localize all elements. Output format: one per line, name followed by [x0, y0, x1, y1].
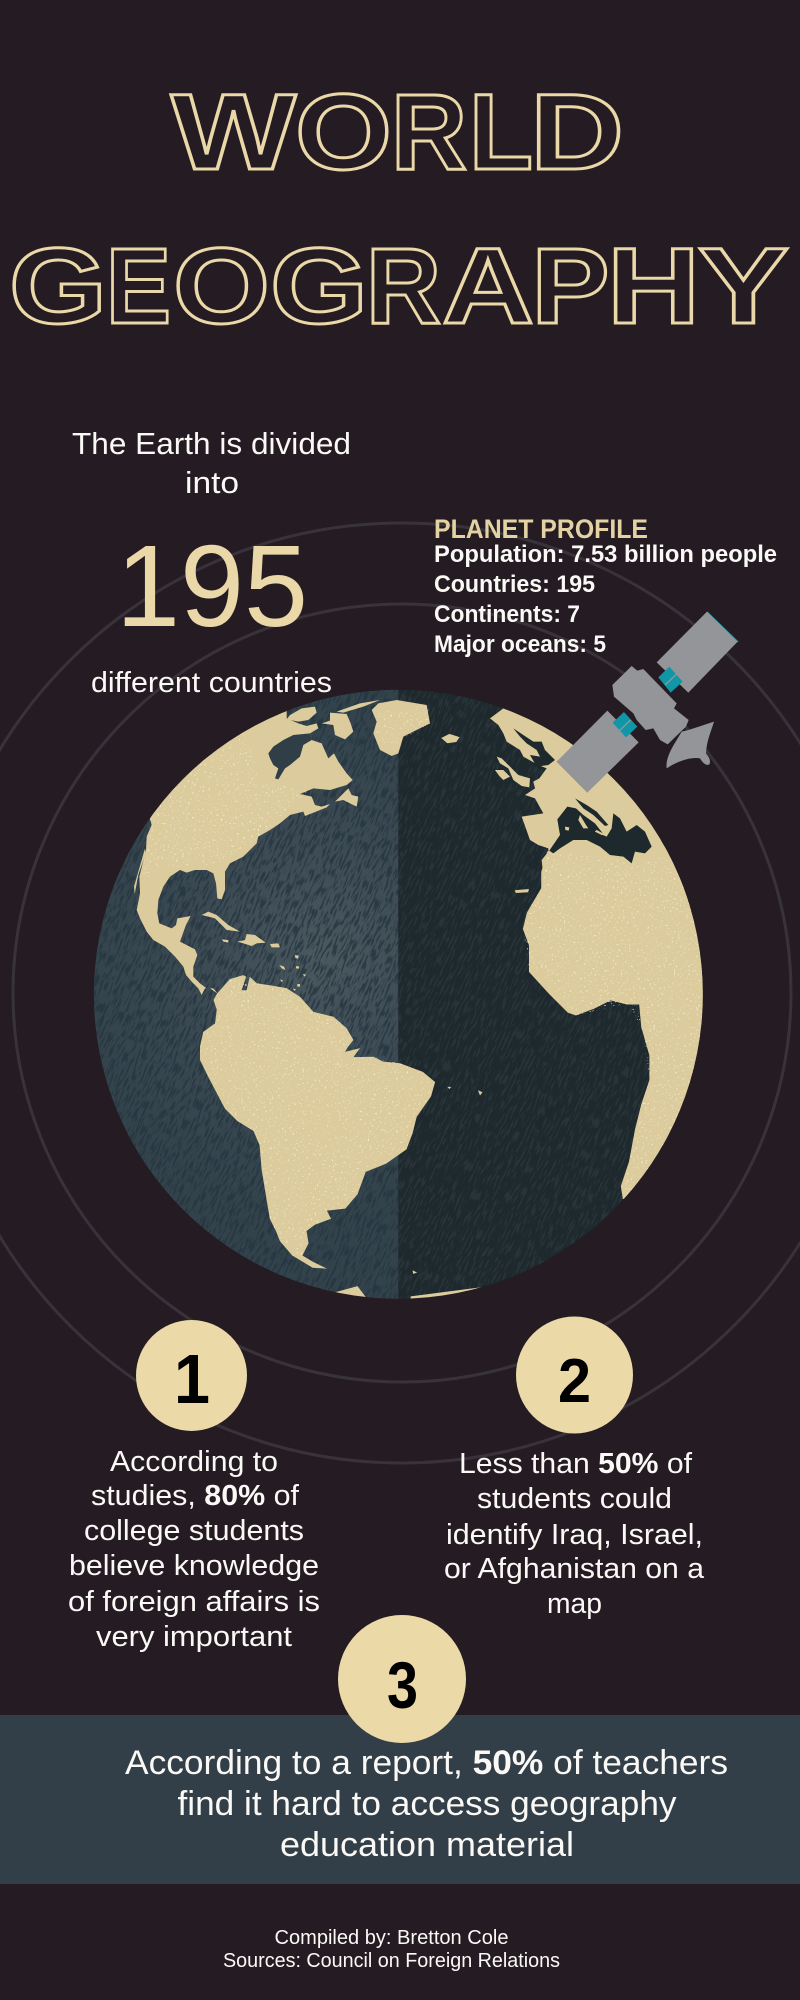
- connector gaps: [619, 674, 677, 731]
- Europe: [490, 708, 688, 900]
- Africa: [522, 846, 703, 1200]
- fact 2 text: map: [547, 1588, 602, 1620]
- fact 1 text: of foreign affairs is: [68, 1586, 320, 1618]
- population: Population: 7.53 billion people: [434, 541, 777, 568]
- big number 195: 195: [116, 521, 308, 651]
- number 2: 2: [558, 1347, 591, 1416]
- globe: [94, 690, 703, 1299]
- satellite dish: [666, 722, 714, 768]
- title line: GEOGRAPHY: H: [607, 225, 700, 346]
- fact 3 text: education material: [280, 1826, 574, 1864]
- title line: GEOGRAPHY: P: [532, 225, 610, 346]
- badge 1: [136, 1320, 247, 1431]
- South America: [200, 975, 435, 1269]
- orbit rings: [0, 523, 800, 1463]
- fact 2 text: students could: [477, 1483, 672, 1515]
- Baja California: [134, 848, 146, 894]
- title line: WORLD: O: [295, 71, 392, 192]
- ocean texture right: [398, 690, 650, 1298]
- badge 3: [338, 1615, 466, 1743]
- ocean right half: [398, 690, 650, 1298]
- fact 1 text: college students: [84, 1515, 304, 1547]
- Iceland: [441, 734, 460, 743]
- ocean texture left: [94, 690, 398, 1298]
- title line: WORLD: R: [391, 71, 467, 192]
- panel: fact 3 band: [0, 1615, 800, 1884]
- fact 1 text: studies, 80% of: [91, 1480, 300, 1512]
- sources: Sources: Council on Foreign Relations: [223, 1950, 560, 1972]
- title line: GEOGRAPHY: G: [9, 225, 107, 346]
- title line: GEOGRAPHY: G: [270, 225, 368, 346]
- fact 1 text: According to: [110, 1446, 278, 1478]
- Greenland: [372, 700, 430, 756]
- major oceans: Major oceans: 5: [434, 631, 606, 658]
- Mediterranean islands: [565, 815, 606, 835]
- Newfoundland: [335, 788, 358, 807]
- continents: Continents: 7: [434, 601, 580, 628]
- Arctic islands: [287, 700, 380, 739]
- countries: Countries: 195: [434, 571, 595, 598]
- Mediterranean Sea: [549, 807, 652, 863]
- satellite body: [612, 666, 689, 744]
- title line: GEOGRAPHY: Y: [698, 225, 789, 346]
- fact 2 text: [444, 1448, 705, 1620]
- fact 1: [68, 1320, 320, 1653]
- continents: [97, 683, 780, 1304]
- compiled by: Compiled by: Bretton Cole: [274, 1927, 508, 1949]
- footer credits: [223, 1927, 560, 1972]
- icon: satellite: [557, 612, 739, 793]
- panel: planet profile: [434, 514, 777, 658]
- title line: WORLD: D: [530, 71, 624, 192]
- British Isles: [495, 757, 530, 787]
- badge 2: [516, 1316, 633, 1434]
- title line: WORLD: W: [171, 71, 296, 192]
- title line: GEOGRAPHY: O: [173, 225, 270, 346]
- Caribbean islands: [202, 912, 306, 991]
- fact 3 text: find it hard to access geography: [178, 1785, 676, 1823]
- title line: GEOGRAPHY: R: [366, 225, 441, 346]
- fact 1 text: believe knowledge: [69, 1550, 319, 1582]
- title line: WORLD: L: [469, 71, 533, 192]
- title line: GEOGRAPHY: A: [442, 225, 534, 346]
- fact 2 text: Less than 50% of: [459, 1448, 693, 1480]
- fact 2: [444, 1316, 705, 1620]
- intro line 1: The Earth is divided: [72, 426, 351, 461]
- fact 3 text: [125, 1744, 728, 1864]
- intro line 3: different countries: [91, 667, 332, 699]
- band background: [0, 1715, 800, 1884]
- lower solar panel: [557, 711, 639, 793]
- North America: [136, 711, 353, 995]
- Adriatic channel: [575, 798, 608, 826]
- Atlantic islands: [447, 889, 529, 1096]
- title line: GEOGRAPHY: E: [106, 225, 171, 346]
- fact 3 text: According to a report, 50% of teachers: [125, 1744, 728, 1782]
- number 3: 3: [387, 1648, 418, 1722]
- land speckle: [142, 705, 703, 1256]
- Hudson Bay: [268, 733, 312, 779]
- fact 1 text: [68, 1446, 320, 1653]
- profile heading: PLANET PROFILE: [434, 514, 648, 544]
- fact 1 text: very important: [96, 1621, 292, 1653]
- connectors: [613, 667, 683, 737]
- upper solar panel: [657, 612, 738, 693]
- intro line 2: into: [185, 465, 239, 500]
- ocean left half: [80, 680, 398, 1320]
- solar panel edges: [557, 612, 739, 793]
- intro text: 195 countries: [72, 426, 351, 699]
- seas on the right: [513, 728, 652, 863]
- Baltic Sea: [513, 728, 555, 767]
- number 1: 1: [174, 1340, 210, 1418]
- fact 2 text: or Afghanistan on a: [444, 1553, 705, 1585]
- Antarctica: [336, 1270, 482, 1298]
- fact 2 text: identify Iraq, Israel,: [446, 1519, 703, 1551]
- title: [9, 71, 789, 346]
